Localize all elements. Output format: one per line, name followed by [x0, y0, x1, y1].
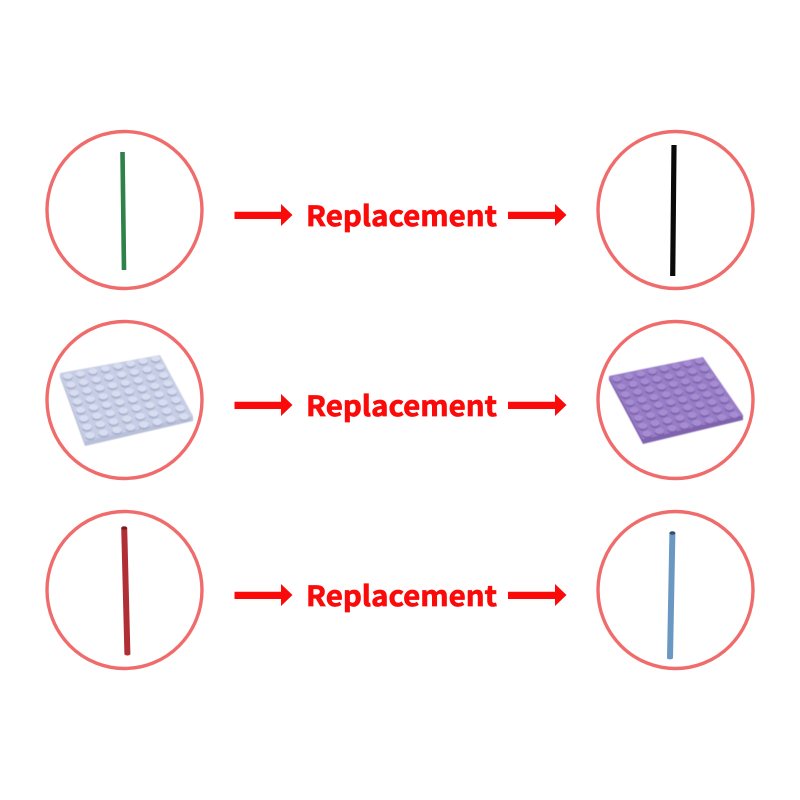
row 3: red tube replaced by blue tube: [47, 512, 753, 668]
arrow: right: [508, 204, 566, 226]
plate: purple: [609, 357, 743, 444]
left circle: green rod: [47, 132, 202, 288]
arrow: left: [234, 394, 292, 416]
right circle: purple studded plate: [598, 322, 753, 478]
right circle: black rod: [598, 132, 753, 288]
arrow: left: [234, 584, 292, 606]
left circle: light blue-grey studded plate: [47, 322, 202, 478]
row 2: light plate replaced by purple plate: [47, 322, 753, 478]
arrow: right: [508, 584, 566, 606]
right circle: blue tube: [598, 512, 753, 668]
arrow: right: [508, 394, 566, 416]
plate: light: [60, 355, 193, 446]
label: Replacement: Replacement: [306, 385, 497, 425]
left circle: red tube: [47, 512, 202, 668]
label: Replacement: Replacement: [306, 575, 497, 615]
label: Replacement: Replacement: [306, 195, 497, 235]
row 1: green rod replaced by black rod: [47, 132, 753, 288]
arrow: left: [234, 204, 292, 226]
